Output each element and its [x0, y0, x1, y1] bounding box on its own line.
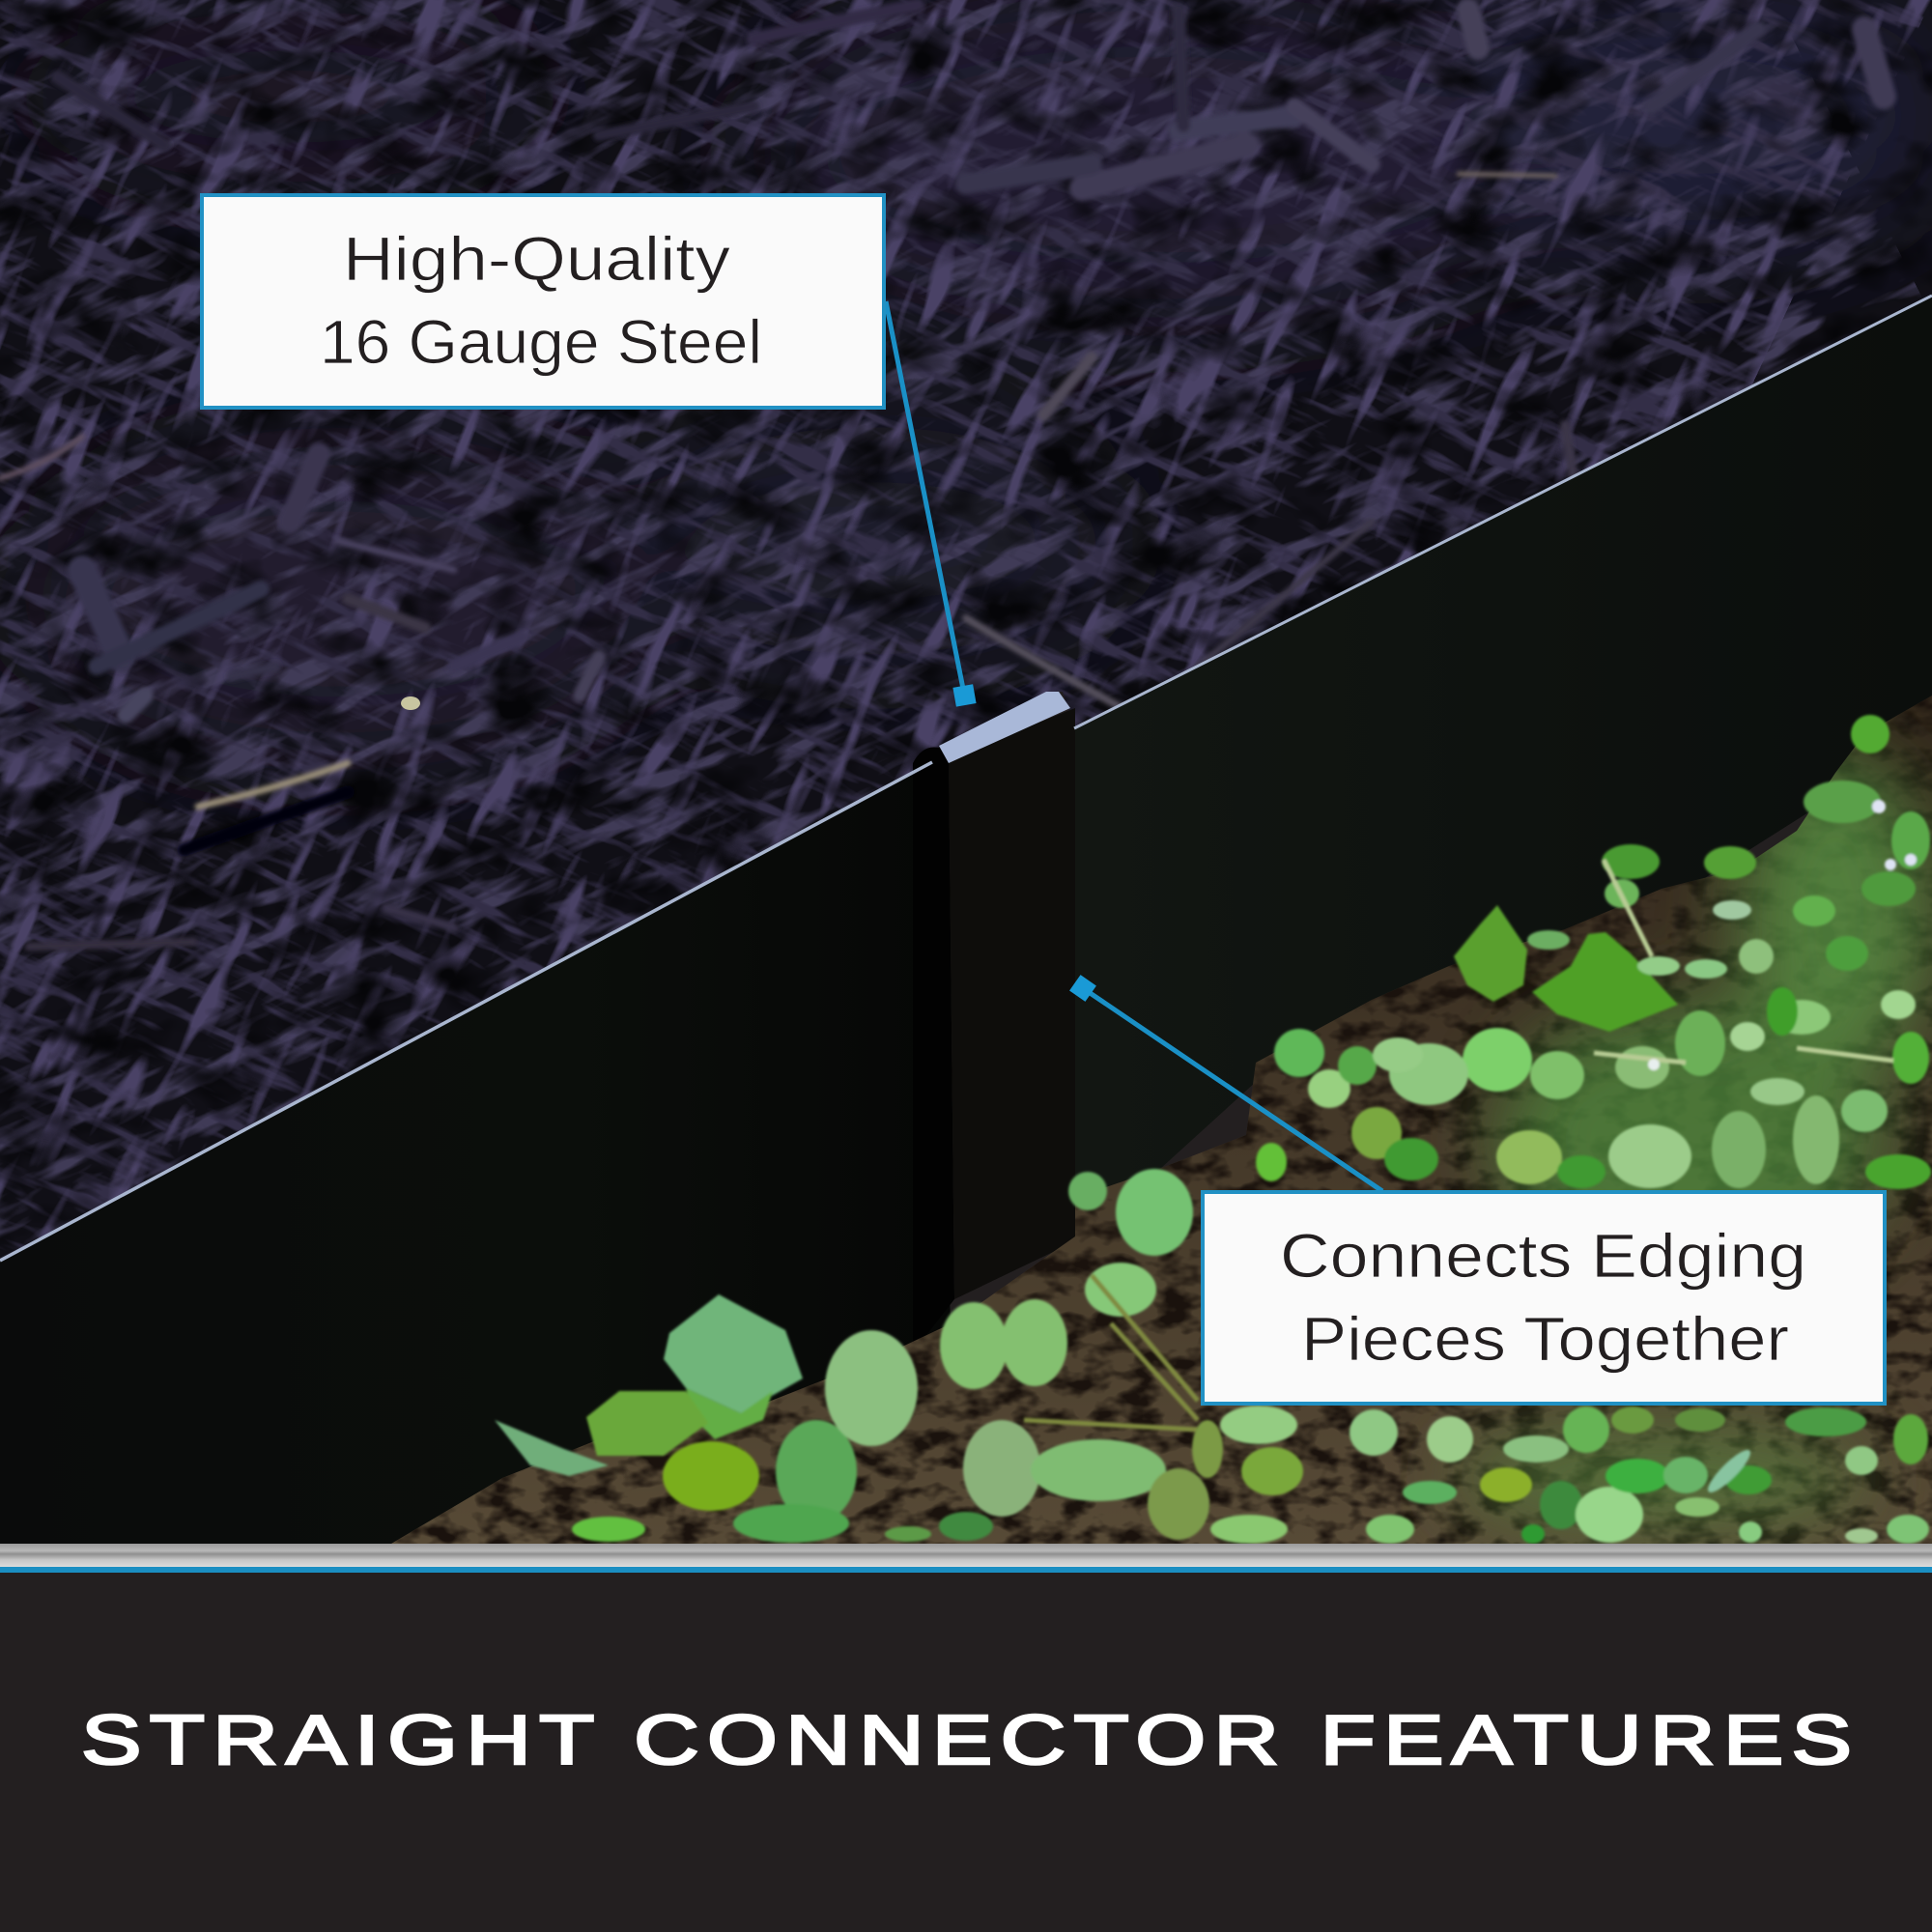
right steel panel	[1074, 296, 1932, 1246]
marker: connects	[1069, 975, 1096, 1002]
callout: connects pieces	[1203, 1192, 1885, 1404]
bottom title panel	[0, 1573, 1932, 1932]
connector top edge	[939, 692, 1070, 763]
leader line: connects	[1069, 975, 1382, 1191]
title: STRAIGHT CONNECTOR FEATURES	[81, 1700, 1852, 1779]
leaves: lower left group	[495, 1169, 1209, 1543]
connector plate	[949, 708, 1075, 1299]
soil	[367, 676, 1932, 1546]
blue accent line	[0, 1567, 1932, 1573]
mulch bed	[0, 0, 1932, 1259]
callout text: pieces together: Pieces Together	[1301, 1304, 1789, 1374]
photo: garden edging with mulch and plants	[0, 0, 1932, 1544]
leaves: bottom right strip	[885, 1406, 1929, 1544]
lighter mulch speck	[401, 696, 420, 710]
leaves: big centre-right leaves	[1256, 715, 1931, 1189]
panel top edge highlights	[0, 296, 1932, 1261]
metallic band	[0, 1544, 1932, 1567]
callout text: connects edging: Connects Edging	[1280, 1221, 1806, 1291]
callout text: high-quality: High-Quality	[343, 224, 730, 294]
left steel panel	[0, 761, 952, 1544]
marker: steel gauge	[952, 684, 977, 707]
callout: high-quality steel	[202, 195, 884, 408]
connector shadow	[913, 748, 954, 1352]
callout text: 16 gauge steel: 16 Gauge Steel	[320, 307, 762, 377]
leader line: steel gauge	[886, 301, 977, 707]
